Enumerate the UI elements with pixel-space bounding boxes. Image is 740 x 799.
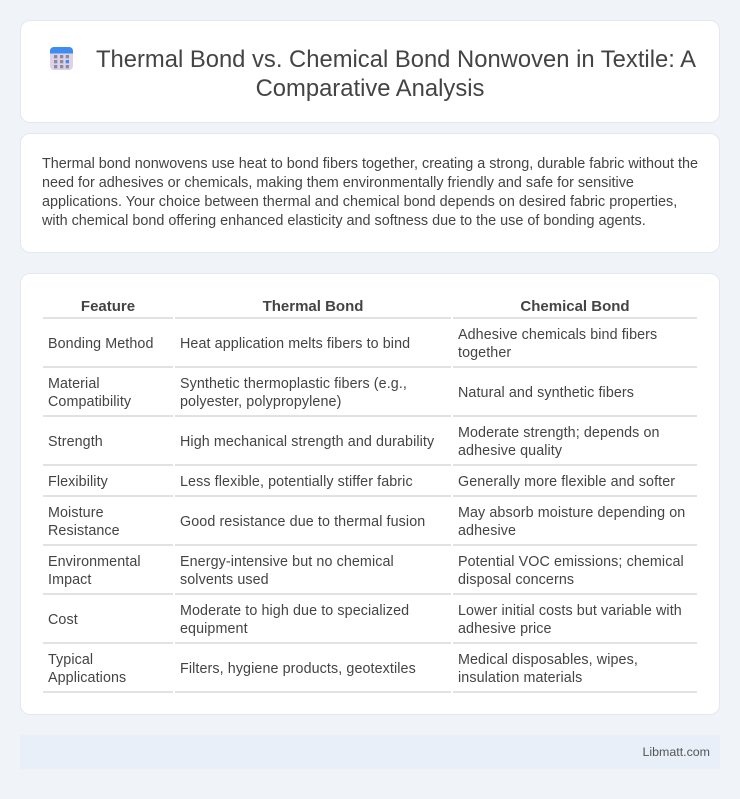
row: typical applications: Medical disposables, wipes, <box>458 652 638 668</box>
row: material compatibility: Material <box>48 376 100 392</box>
table header: thermal bond: Thermal Bond <box>263 298 363 315</box>
row: cost: equipment <box>180 621 248 637</box>
footer credit: Libmatt.com <box>643 745 710 759</box>
row: moisture resistance <box>48 505 685 539</box>
row: cost <box>48 603 682 637</box>
row: flexibility: Generally more flexible and softer <box>458 474 675 490</box>
row: flexibility: Flexibility <box>48 474 108 490</box>
row: moisture resistance: Resistance <box>48 523 120 539</box>
row: moisture resistance: Good resistance due to thermal fusion <box>180 514 425 530</box>
row: environmental impact: Environmental <box>48 554 141 570</box>
row: typical applications <box>48 652 638 686</box>
row: strength <box>48 425 660 459</box>
row: strength: adhesive quality <box>458 443 562 459</box>
row: strength: High mechanical strength and durability <box>180 434 434 450</box>
row: bonding method: Heat application melts fibers to bind <box>180 336 410 352</box>
icon: calendar <box>50 47 73 70</box>
row: strength: Strength <box>48 434 103 450</box>
row: typical applications: Filters, hygiene products, geotextiles <box>180 661 416 677</box>
row: bonding method <box>48 327 657 361</box>
table header: feature: Feature <box>81 298 135 315</box>
row: environmental impact: Impact <box>48 572 92 588</box>
row: environmental impact: disposal concerns <box>458 572 574 588</box>
row: bonding method: together <box>458 345 511 361</box>
row: typical applications: insulation materials <box>458 670 582 686</box>
comparison table panel <box>20 273 720 715</box>
row: environmental impact: solvents used <box>180 572 269 588</box>
intro panel <box>20 133 720 253</box>
table header: chemical bond: Chemical Bond <box>520 298 630 315</box>
row: strength: Moderate strength; depends on <box>458 425 660 441</box>
row: flexibility <box>48 474 675 490</box>
row: moisture resistance: May absorb moisture depending on <box>458 505 685 521</box>
row: cost: Moderate to high due to specialized <box>180 603 409 619</box>
row: cost: Lower initial costs but variable with <box>458 603 682 619</box>
row: environmental impact: Potential VOC emissions; chemical <box>458 554 684 570</box>
title: Comparative Analysis <box>256 75 484 102</box>
row: cost: adhesive price <box>458 621 552 637</box>
footer bar <box>20 735 720 769</box>
row: moisture resistance: Moisture <box>48 505 104 521</box>
row: material compatibility: Synthetic thermoplastic fibers (e.g., <box>180 376 407 392</box>
row: flexibility: Less flexible, potentially stiffer fabric <box>180 474 413 490</box>
row: typical applications: Typical <box>48 652 93 668</box>
row: typical applications: Applications <box>48 670 126 686</box>
row: material compatibility: polyester, polypropylene) <box>180 394 341 410</box>
row: bonding method: Bonding Method <box>48 336 154 352</box>
row: material compatibility: Natural and synthetic fibers <box>458 385 634 401</box>
row: material compatibility: Compatibility <box>48 394 131 410</box>
title <box>96 46 696 102</box>
row: environmental impact <box>48 554 684 588</box>
row: material compatibility <box>48 376 634 410</box>
row: environmental impact: Energy-intensive but no chemical <box>180 554 394 570</box>
row: moisture resistance: adhesive <box>458 523 516 539</box>
header panel <box>20 20 720 123</box>
row: cost: Cost <box>48 612 78 628</box>
intro text: need for adhesives or chemicals, making them environmentally friendly and safe for sensitive <box>42 174 634 190</box>
row: bonding method: Adhesive chemicals bind fibers <box>458 327 657 343</box>
intro text: applications. Your choice between thermal and chemical bond depends on desired fabric properties, <box>42 194 677 210</box>
title: Thermal Bond vs. Chemical Bond Nonwoven in Textile: A <box>96 46 696 73</box>
intro text <box>42 156 698 228</box>
intro text: with chemical bond offering enhanced elasticity and softness due to the use of bonding agents. <box>42 212 646 228</box>
intro text: Thermal bond nonwovens use heat to bond fibers together, creating a strong, durable fabric without the <box>42 156 698 172</box>
